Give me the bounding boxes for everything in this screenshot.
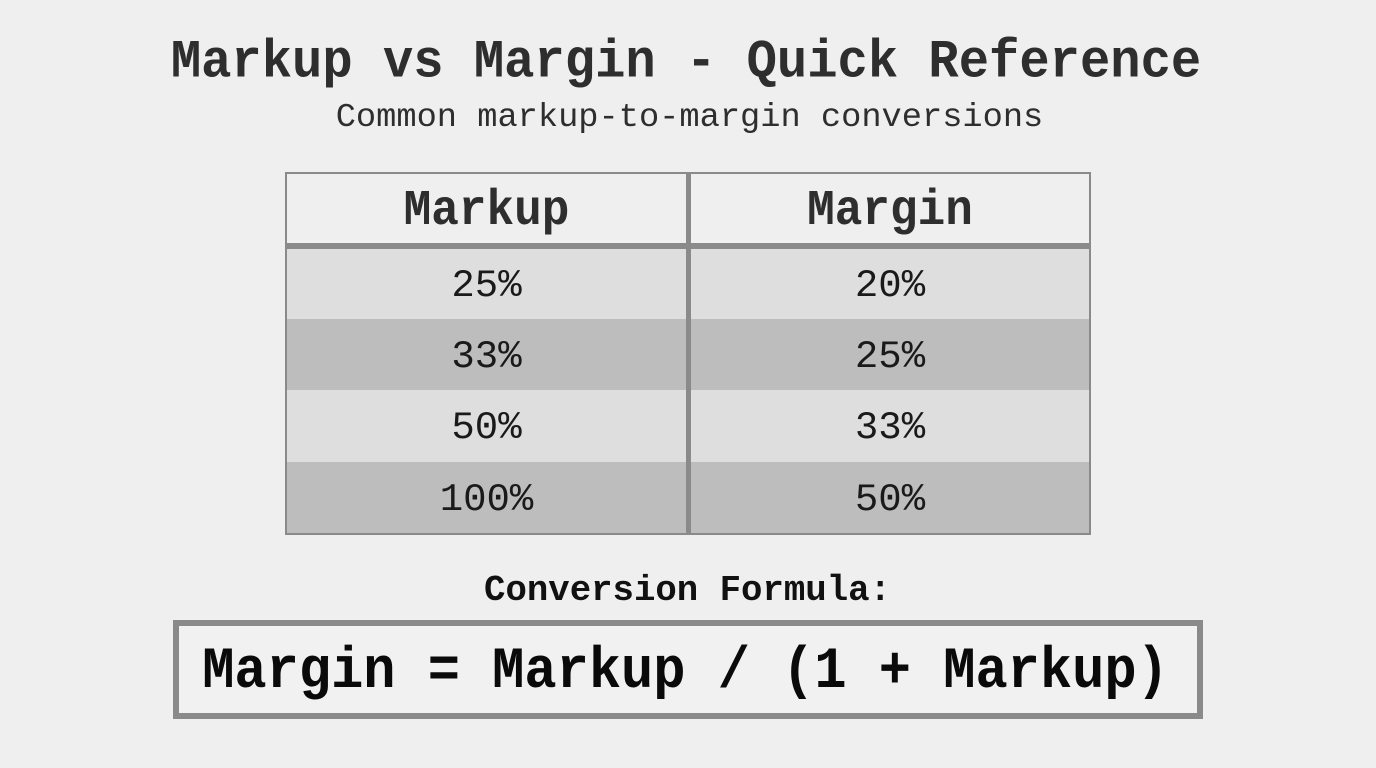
- row 2 margin: 25%: [855, 334, 925, 378]
- row 4 margin: [691, 462, 1089, 533]
- row 2 markup: [287, 319, 686, 390]
- table background and frame: [285, 172, 1091, 535]
- row 3 markup: 50%: [451, 406, 522, 450]
- formula box: [173, 620, 1203, 719]
- subtitle: Common markup-to-margin conversions: [336, 99, 1043, 137]
- row 4 markup: [287, 462, 686, 533]
- header: Markup: Markup: [404, 182, 569, 239]
- row 1 margin: 20%: [855, 264, 925, 308]
- row 1 markup: [287, 249, 686, 319]
- row 2 margin: [691, 319, 1089, 390]
- table: [285, 172, 1091, 535]
- row 4 markup: 100%: [440, 478, 533, 522]
- row 4 margin: 50%: [855, 478, 925, 522]
- row 3 margin: [691, 390, 1089, 462]
- formula heading: Conversion Formula:: [484, 570, 891, 611]
- title: Markup vs Margin - Quick Reference: [171, 33, 1201, 94]
- row 1 margin: [691, 249, 1089, 319]
- formula text: Margin = Markup / (1 + Markup): [202, 639, 1169, 705]
- row 1 markup: 25%: [451, 264, 522, 308]
- row 3 margin: 33%: [855, 406, 925, 450]
- row 3 markup: [287, 390, 686, 462]
- row 2 markup: 33%: [451, 334, 522, 378]
- header: Margin: Margin: [807, 182, 973, 239]
